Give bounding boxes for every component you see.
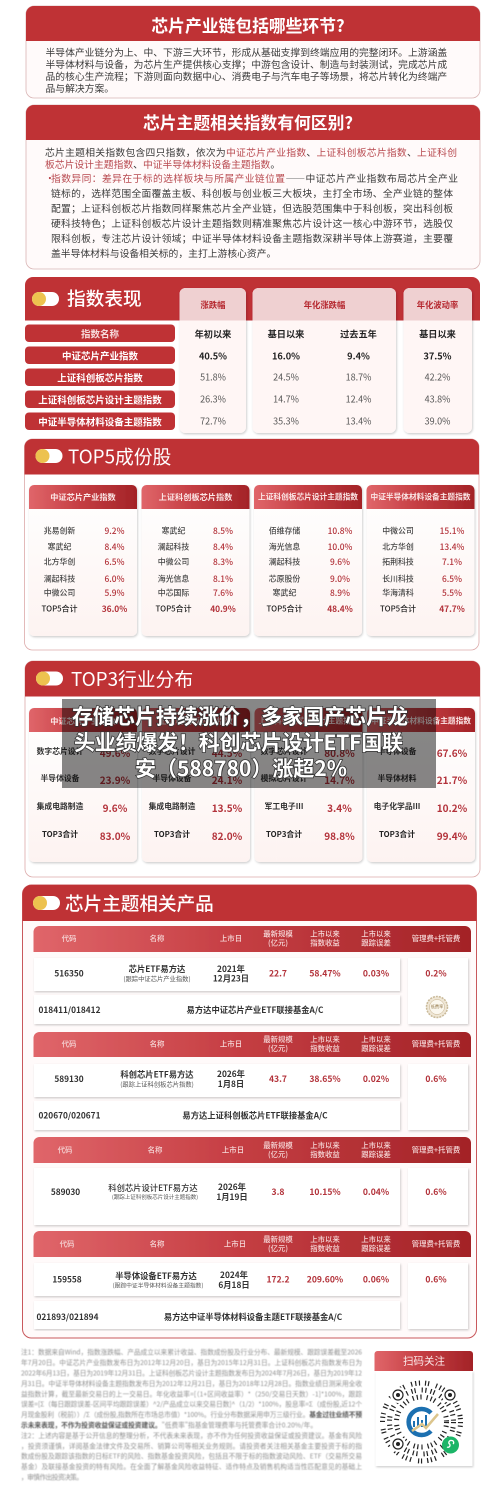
column: annualized volatility: 39.0% xyxy=(425,414,450,428)
product table: 159558: 跟踪误差 xyxy=(361,1243,391,1254)
card: SSE STAR chip: 集成电路制造 xyxy=(149,801,196,812)
column: change: 72.7% xyxy=(200,414,226,428)
card: SSE STAR chip: 8.4% xyxy=(213,541,233,553)
product table: 589130: 38.65% xyxy=(309,1073,341,1085)
text block: index differences xyxy=(45,145,458,260)
product table: 589030: 2026年 xyxy=(218,1181,246,1193)
row labels xyxy=(25,324,175,430)
card: SSE STAR chip design: 48.4% xyxy=(327,603,353,615)
QR card body xyxy=(376,1371,472,1466)
footnotes: 2022年6月13日，基日为2019年12月31日。上证科创板芯片设计主题指数发布日为2024年7月26日，基日为2019年12 xyxy=(21,1368,362,1378)
product table: 159558: 指数收益 xyxy=(310,1243,340,1254)
footnotes: 误差=[Σ（每日跟踪误差-区间平均跟踪误差）^2/产品成立以来交易日数]^（1/2）*100%，股息率=Σ（成份股,近12个 xyxy=(21,1399,362,1409)
text block: index differences: 板芯片设计主题指数、中证半导体材料设备主题指数。 xyxy=(45,157,280,171)
column: annualized return xyxy=(252,288,396,433)
panel: top 5 constituents xyxy=(24,439,479,650)
card: CSI chip industry: 49.6% xyxy=(100,745,131,760)
QR card header xyxy=(374,1351,473,1371)
card: CSI semiconductor materials: 15.1% xyxy=(440,525,464,537)
column: change: 40.5% xyxy=(199,348,227,362)
card: CSI semiconductor materials: 67.6% xyxy=(437,745,468,760)
product table: 589030: 上市日 xyxy=(222,1144,244,1156)
card: CSI semiconductor materials: 中证半导体材料设备主题指数 xyxy=(371,716,471,726)
heading: industry chain: 芯片产业链包括哪些环节? xyxy=(151,13,345,37)
QR heading: 扫码关注 xyxy=(403,1354,445,1368)
product table: 159558: 代码 xyxy=(60,1238,74,1250)
card: CSI semiconductor materials: 5.5% xyxy=(442,587,462,599)
card: CSI chip industry: 中证芯片产业指数 xyxy=(50,491,117,503)
product table: 516350: 22.7 xyxy=(269,968,287,980)
footnotes: 示未来表现，不作为投资收益保证或投资建议。"低费率"指基金管理费率与托管费率合计0.20%/年。 xyxy=(21,1420,317,1430)
heading: top 5: TOP5成份股 xyxy=(68,442,172,470)
product table: 159558: 名称 xyxy=(150,1238,165,1250)
card: SSE STAR chip design: 数字芯片设计 xyxy=(261,746,308,757)
card: SSE STAR chip design: 14.7% xyxy=(324,772,355,787)
card: CSI semiconductor materials: 拓荆科技 xyxy=(382,556,414,568)
card: CSI semiconductor materials xyxy=(367,708,475,862)
column: annualized volatility xyxy=(404,288,472,433)
card: SSE STAR chip: 8.1% xyxy=(213,573,233,585)
product table: 589130: 020670/020671 xyxy=(39,1110,101,1122)
product table: 159558: 6月18日 xyxy=(218,1279,250,1291)
caption background xyxy=(62,699,436,788)
product table: 589030: 3.8 xyxy=(272,1186,284,1198)
card: SSE STAR chip design xyxy=(254,708,362,862)
column: annualized return: 35.3% xyxy=(273,414,299,428)
product table: 159558: 管理费+托管费 xyxy=(412,1238,461,1250)
card: SSE STAR chip design: 80.8% xyxy=(324,745,355,760)
heading: top 3: TOP3行业分布 xyxy=(71,665,193,692)
card: SSE STAR chip design: 佰维存储 xyxy=(269,526,300,536)
card: SSE STAR chip design: 寒武纪 xyxy=(273,588,296,598)
card: SSE STAR chip: 半导体设备 xyxy=(153,773,192,784)
caption text xyxy=(72,701,408,783)
text block: index differences: 限科创板，专注芯片设计领域；中证半导体材料设备主题指数深耕半导体上游赛道，主要覆 xyxy=(51,231,453,245)
card: CSI semiconductor materials: TOP3合计 xyxy=(379,829,415,840)
product table: 589130: (亿元) xyxy=(268,1043,288,1054)
icon: low fee seal: 低费率 xyxy=(431,1003,443,1010)
column: change: 涨跌幅 xyxy=(201,299,225,311)
product table: 159558: 0.06% xyxy=(363,1274,389,1286)
card: CSI chip industry: 中证芯片产业指数 xyxy=(50,715,117,727)
product table: 516350: 上市日 xyxy=(220,933,242,944)
product table: 589030: 跟踪误差 xyxy=(361,1149,391,1160)
footnotes: 月现金股利（税前））/Σ（成份股,指数所在市场总市值）*100%。行业分布数据采用申万三级行业。基金过往业绩不预 xyxy=(21,1409,362,1419)
card: SSE STAR chip design: 8.9% xyxy=(330,587,350,599)
text block: industry chain: 半导体材料与设备，为芯片生产提供核心支撑；中游包含设计、制造与封装测试，完成芯片成 xyxy=(46,57,447,71)
product table: 516350: 58.47% xyxy=(309,968,341,980)
product table: 516350: 管理费+托管费 xyxy=(412,933,461,944)
footnotes: 数成份股及跟踪该指数的日标ETF的风险、指数基金投资风险，包括且不限于标的指数波动风险、ETF（交易所交易 xyxy=(21,1451,362,1461)
card: SSE STAR chip design: 海光信息 xyxy=(269,542,300,552)
product table: 516350: 0.2% xyxy=(425,968,447,980)
heading: index performance: 指数表现 xyxy=(67,284,142,312)
card: CSI chip industry: 中微公司 xyxy=(44,588,75,598)
product table: 589030 xyxy=(34,1137,471,1225)
card: CSI chip industry: 半导体设备 xyxy=(41,773,80,784)
row labels: 中证芯片产业指数 xyxy=(62,348,138,362)
product table: 159558: 209.60% xyxy=(307,1274,343,1286)
product table: 516350: 最新规模 xyxy=(263,928,293,940)
product table: 589130: 1月8日 xyxy=(218,1078,244,1090)
product table: 589030: 0.04% xyxy=(363,1186,389,1198)
card: CSI semiconductor materials: 10.2% xyxy=(437,800,468,815)
card: SSE STAR chip: 8.5% xyxy=(213,525,233,537)
card: SSE STAR chip: TOP3合计 xyxy=(154,829,190,840)
row labels: 上证科创板芯片指数 xyxy=(57,370,143,384)
card: SSE STAR chip: 上证科创板芯片指数 xyxy=(159,491,233,503)
card: CSI semiconductor materials: 6.5% xyxy=(442,573,462,585)
card: SSE STAR chip: 7.6% xyxy=(213,587,233,599)
panel: industry chain xyxy=(26,6,480,98)
product table: 589130: 上市以来 xyxy=(361,1034,391,1045)
product table: 159558: 上市以来 xyxy=(361,1234,391,1245)
card: SSE STAR chip design: 10.0% xyxy=(328,541,352,553)
product table: 589030: 上市以来 xyxy=(361,1140,391,1151)
product table: 589030: (跟踪上证科创板芯片设计主题指数) xyxy=(112,1193,198,1201)
product table: 159558: 上市以来 xyxy=(310,1234,340,1245)
product table: 159558: (跟踪中证半导体材料设备主题指数) xyxy=(113,1280,203,1290)
heading: related products: 芯片主题相关产品 xyxy=(65,890,214,916)
row labels: 指数名称 xyxy=(81,326,119,340)
text block: index differences: 芯片主题相关指数包含四只指数，依次为中证芯片产业指数、上证科创板芯片指数、上证科创 xyxy=(45,145,457,159)
column: annualized volatility: 基日以来 xyxy=(419,326,456,340)
product table: 159558: 2024年 xyxy=(220,1269,248,1281)
product table: 516350: 0.03% xyxy=(363,968,389,980)
product table: 589030: 589030 xyxy=(51,1186,80,1198)
text block: industry chain: 半导体产业链分为上、中、下游三大环节，形成从基础支撑到终端应用的完整闭环。上游涵盖 xyxy=(46,45,447,59)
product table: 589030: 管理费+托管费 xyxy=(412,1144,461,1156)
product table: 589130: 科创芯片ETF易方达 xyxy=(120,1068,194,1080)
product table: 589130: 0.6% xyxy=(425,1073,447,1085)
panel: index differences xyxy=(26,105,480,269)
card: SSE STAR chip design: TOP3合计 xyxy=(266,829,302,840)
product table: 159558: (亿元) xyxy=(268,1243,288,1254)
card: CSI semiconductor materials: 北方华创 xyxy=(382,542,414,552)
card: SSE STAR chip: 数字芯片设计 xyxy=(149,746,196,757)
panel background xyxy=(22,885,476,1338)
card: CSI chip industry: 8.4% xyxy=(105,541,125,553)
card: SSE STAR chip: 中微公司 xyxy=(158,556,189,568)
card: SSE STAR chip design: 3.4% xyxy=(327,800,352,815)
card: SSE STAR chip design: 军工电子III xyxy=(265,801,303,812)
product table: 589130: 上市日 xyxy=(220,1038,242,1050)
panel: index performance xyxy=(25,277,480,433)
card: CSI semiconductor materials: 半导体设备 xyxy=(378,746,417,757)
product table: 589130: 上市以来 xyxy=(310,1034,340,1045)
card: SSE STAR chip: 8.3% xyxy=(213,556,233,568)
card: CSI chip industry: 6.5% xyxy=(105,556,125,568)
product table: 589130: 43.7 xyxy=(269,1073,287,1085)
product table: 589030: 名称 xyxy=(148,1144,163,1156)
product table: 589130: 名称 xyxy=(150,1038,165,1050)
product table: 589130: 跟踪误差 xyxy=(361,1043,391,1054)
text block: industry chain: 品的核心生产流程；下游则面向数据中心、消费电子与汽车电子等场景，将芯片转化为终端产 xyxy=(46,69,447,83)
product table: 589030: 指数收益 xyxy=(310,1149,340,1160)
footnotes: ，投资须谨慎，详阅基金法律文件及交易所、销算公司等相关业务规则。请投资者关注相关基金主要投资于标的指 xyxy=(21,1440,362,1450)
card: SSE STAR chip design: 10.8% xyxy=(328,525,352,537)
card: CSI chip industry: 寒武纪 xyxy=(48,542,71,552)
footnotes xyxy=(21,1347,362,1482)
column: annualized return: 过去五年 xyxy=(340,326,377,340)
QR card xyxy=(374,1351,473,1466)
footnotes: 注2：上述内容是基于公开信息的整理分析，不代表未来表现，亦不作为任何投资收益保证或投资建议。基金有风险 xyxy=(21,1430,362,1440)
card: CSI semiconductor materials: 99.4% xyxy=(437,828,468,843)
product table: 589130: 589130 xyxy=(54,1073,84,1085)
product table: 589030: 最新规模 xyxy=(263,1140,293,1151)
product table: 589130: 最新规模 xyxy=(263,1034,293,1045)
product table: 589030: 0.6% xyxy=(425,1186,447,1198)
card: CSI chip industry: 6.0% xyxy=(105,573,125,585)
card: CSI semiconductor materials: 长川科技 xyxy=(382,574,414,584)
product table: 516350: (跟踪中证芯片产业指数) xyxy=(123,974,191,983)
footnotes: 年7月20日。中证芯片产业指数发布日为2012年12月20日，基日为2015年12月31日。上证科创板芯片指数发布日为 xyxy=(21,1357,362,1367)
caption text: 头业绩爆发！科创芯片设计ETF国联 xyxy=(74,727,403,757)
card: SSE STAR chip xyxy=(142,485,250,636)
product table: 516350: 2021年 xyxy=(217,963,245,975)
icon: toggle xyxy=(32,292,59,306)
card: CSI semiconductor materials: 电子化学品III xyxy=(374,801,420,812)
product table: 159558: 172.2 xyxy=(266,1274,290,1286)
footnotes: 基金）及联接基金投资的特有风险。在全面了解基金风险收益特征、适作特点及销售机构适当性匹配意见的基础上 xyxy=(21,1461,362,1471)
panel: related products xyxy=(22,885,476,1338)
column: change xyxy=(180,288,246,433)
card: CSI semiconductor materials: 中微公司 xyxy=(382,526,414,536)
column: annualized volatility: 年化波动率 xyxy=(417,299,458,311)
product table: 159558: 半导体设备ETF易方达 xyxy=(115,1270,197,1282)
card: CSI chip industry: 数字芯片设计 xyxy=(37,746,84,757)
panel header bar xyxy=(22,885,476,921)
card: SSE STAR chip design: 澜起科技 xyxy=(269,556,300,568)
row labels: 中证半导体材料设备主题指数 xyxy=(38,414,162,428)
icon: low fee seal xyxy=(426,996,448,1018)
column: annualized return: 13.4% xyxy=(346,414,371,428)
card: SSE STAR chip: 44.5% xyxy=(212,745,243,760)
column: annualized return: 9.4% xyxy=(347,348,370,362)
footnotes: 注1：数据来自Wind，指数涨跌幅、产品成立以来累计收益、指数成份股及行业分布、最新规模、跟踪误差截至2026 xyxy=(21,1347,362,1357)
card: SSE STAR chip: TOP5合计 xyxy=(156,604,192,614)
text block: index differences: 指数异同：差异在于标的选样板块与所属产业链位置——中证芯片产业指数布局芯片全产业 xyxy=(51,171,458,185)
card: SSE STAR chip: 中芯国际 xyxy=(158,588,189,598)
product table: 589130: 指数收益 xyxy=(310,1043,340,1054)
column: annualized return: 14.7% xyxy=(273,392,299,406)
card: SSE STAR chip: 澜起科技 xyxy=(158,542,189,552)
column: change: 51.8% xyxy=(200,370,226,384)
panel header bar xyxy=(24,439,479,474)
card: CSI chip industry: 集成电路制造 xyxy=(37,801,84,812)
product table: 589130: (跟踪上证科创板芯片指数) xyxy=(120,1080,194,1088)
product table: 589030: 10.15% xyxy=(309,1186,341,1198)
product table: 159558: 0.6% xyxy=(425,1274,447,1286)
product table: 516350: 跟踪误差 xyxy=(361,938,391,948)
product table: 159558: 易方达中证半导体材料设备主题ETF联接基金A/C xyxy=(164,1311,343,1323)
product table: 589030: 上市以来 xyxy=(310,1140,340,1151)
product table: 159558: 159558 xyxy=(52,1274,82,1286)
product table: 589030: 代码 xyxy=(58,1144,72,1156)
card: CSI semiconductor materials: 21.7% xyxy=(437,772,468,787)
column: annualized return: 24.5% xyxy=(273,370,299,384)
product table: 589030: 1月19日 xyxy=(216,1191,248,1203)
text block: industry chain: 品与解决方案。 xyxy=(46,81,114,95)
card: SSE STAR chip xyxy=(142,708,250,862)
column: annualized volatility: 42.2% xyxy=(425,370,450,384)
card: SSE STAR chip design xyxy=(254,485,362,636)
panel header bar xyxy=(25,661,480,696)
heading: index differences: 芯片主题相关指数有何区别? xyxy=(143,110,353,134)
card: SSE STAR chip design: 9.0% xyxy=(330,573,350,585)
card: SSE STAR chip design: TOP5合计 xyxy=(267,604,303,614)
product table: 516350: 上市以来 xyxy=(361,928,391,940)
icon: toggle xyxy=(36,672,63,686)
card: SSE STAR chip design: 上证科创板芯片设计主题指数 xyxy=(258,492,358,502)
card: CSI semiconductor materials xyxy=(366,485,474,636)
card: CSI chip industry: 北方华创 xyxy=(44,556,75,568)
product table: 516350: 易方达中证芯片产业ETF联接基金A/C xyxy=(187,1004,324,1016)
card: CSI chip industry: 9.2% xyxy=(105,525,125,537)
product table: 516350: 12月23日 xyxy=(213,972,249,984)
product table: 516350: (亿元) xyxy=(268,938,288,948)
panel header bar xyxy=(26,105,480,140)
product table: 589130: 管理费+托管费 xyxy=(412,1038,461,1050)
card: CSI chip industry: 兆易创新 xyxy=(44,526,75,536)
card: SSE STAR chip design: 上证科创板芯片设计主题指数 xyxy=(259,716,359,726)
overlay caption xyxy=(62,699,436,788)
column: annualized return: 18.7% xyxy=(346,370,371,384)
footnotes: 月31日。中证半导体材料设备主题指数发布日为2012年12月21日，基日为2018年12月28日。指数业绩日测采用全收 xyxy=(21,1378,362,1388)
card: CSI chip industry xyxy=(29,708,137,862)
icon: toggle xyxy=(36,449,62,463)
card: CSI chip industry: 9.6% xyxy=(103,800,128,815)
column: annualized return: 基日以来 xyxy=(268,326,304,340)
column: change: 26.3% xyxy=(200,392,226,406)
caption text: 安（588780）涨超2% xyxy=(135,753,347,783)
product table: 589130: 2026年 xyxy=(217,1068,245,1080)
product table: 589030: (亿元) xyxy=(268,1149,288,1160)
column: annualized volatility: 37.5% xyxy=(423,348,452,362)
product table: 159558 xyxy=(34,1231,471,1329)
text block: index differences: 链标的，选样范围全面覆盖主板、科创板与创业板三大板块，主打全市场、全产业链的整体 xyxy=(51,186,453,200)
card: CSI chip industry: 83.0% xyxy=(100,828,131,843)
product table: 516350: 上市以来 xyxy=(310,928,340,940)
card: CSI semiconductor materials: 华海清科 xyxy=(382,588,414,598)
panel: top 3 industries xyxy=(25,661,480,877)
card: CSI chip industry: TOP3合计 xyxy=(42,829,78,840)
product table: 589130 xyxy=(34,1032,471,1130)
card: SSE STAR chip: 寒武纪 xyxy=(162,526,185,536)
column: annualized return: 12.4% xyxy=(346,392,371,406)
card: SSE STAR chip design: 芯原股份 xyxy=(269,574,300,584)
card: SSE STAR chip design: 9.6% xyxy=(330,556,350,568)
card: CSI chip industry: 36.0% xyxy=(102,603,127,615)
text block: index differences: 盖半导体材料与设备相关标的，主打上游核心资产。 xyxy=(51,246,276,260)
product table: 516350: 芯片ETF易方达 xyxy=(129,963,186,975)
card: SSE STAR chip: 40.9% xyxy=(210,603,236,615)
text block: index differences: 配置；上证科创板芯片指数同样聚焦芯片全产业链，但选股范围集中于科创板，突出科创板 xyxy=(51,201,453,215)
panel header bar xyxy=(25,277,480,320)
product table: 516350 xyxy=(34,926,471,1024)
product table: 159558: 最新规模 xyxy=(263,1234,293,1245)
card: CSI semiconductor materials: 中证半导体材料设备主题指数 xyxy=(371,492,471,502)
footnotes: 益指数计算，截至最新交易日的上一交易日。年化收益率=[（1+区间收益率）*（250/交易日天数）-1]*100%，跟踪 xyxy=(21,1388,362,1398)
panel background xyxy=(24,439,479,650)
card: SSE STAR chip: 82.0% xyxy=(212,828,243,843)
column: annualized volatility: 43.8% xyxy=(425,392,450,406)
card: CSI chip industry: 5.9% xyxy=(105,587,125,599)
column: annualized return: 年化涨跌幅 xyxy=(304,299,345,311)
product table: 159558: 上市日 xyxy=(224,1238,246,1250)
panel header bar xyxy=(26,6,480,41)
card: SSE STAR chip: 24.1% xyxy=(212,772,243,787)
card: CSI chip industry: 23.9% xyxy=(100,772,131,787)
text block: industry chain xyxy=(46,45,447,95)
card: CSI semiconductor materials: 47.7% xyxy=(439,603,465,615)
product table: 516350: 018411/018412 xyxy=(39,1004,101,1016)
card: CSI semiconductor materials: 7.1% xyxy=(442,556,462,568)
card: CSI semiconductor materials: 13.4% xyxy=(440,541,464,553)
product table: 516350: 指数收益 xyxy=(310,938,340,948)
card: SSE STAR chip: 13.5% xyxy=(212,800,243,815)
product table: 516350: 名称 xyxy=(150,933,165,944)
product table: 516350: 代码 xyxy=(62,933,76,944)
card: SSE STAR chip design: 98.8% xyxy=(324,828,355,843)
panel background xyxy=(26,105,480,269)
product table: 589130: 易方达上证科创板芯片ETF联接基金A/C xyxy=(182,1110,328,1122)
product table: 516350: 516350 xyxy=(54,968,84,980)
caption text: 存储芯片持续涨价，多家国产芯片龙 xyxy=(72,701,408,731)
icon: mini program code xyxy=(382,1383,460,1461)
column: change: 年初以来 xyxy=(195,326,231,340)
card: CSI semiconductor materials: 半导体材料 xyxy=(378,773,417,784)
icon: toggle xyxy=(33,896,60,910)
product table: 159558: 021893/021894 xyxy=(37,1311,99,1323)
card: CSI chip industry: 澜起科技 xyxy=(44,574,75,584)
column: annualized return: 16.0% xyxy=(272,348,300,362)
card: CSI chip industry: TOP5合计 xyxy=(42,604,78,614)
panel background xyxy=(26,6,480,98)
product table: 589030: 科创芯片设计ETF易方达 xyxy=(108,1182,198,1194)
card: SSE STAR chip design: 模拟芯片设计 xyxy=(261,773,308,784)
card: SSE STAR chip: 上证科创板芯片指数 xyxy=(159,715,234,727)
panel background xyxy=(25,661,480,877)
row labels: 上证科创板芯片设计主题指数 xyxy=(38,392,162,406)
text block: index differences: • xyxy=(45,171,55,185)
card: CSI semiconductor materials: TOP5合计 xyxy=(380,604,416,614)
card: SSE STAR chip: 海光信息 xyxy=(158,574,189,584)
footnotes: ，审慎作出投资决策。 xyxy=(21,1472,83,1482)
product table: 589130: 0.02% xyxy=(363,1073,389,1085)
text block: index differences: 硬科技特色；上证科创板芯片设计主题指数则精准聚焦芯片设计这一核心中游环节，选股仅 xyxy=(51,216,453,230)
product table: 589130: 代码 xyxy=(62,1038,76,1050)
card: CSI chip industry xyxy=(29,485,137,636)
